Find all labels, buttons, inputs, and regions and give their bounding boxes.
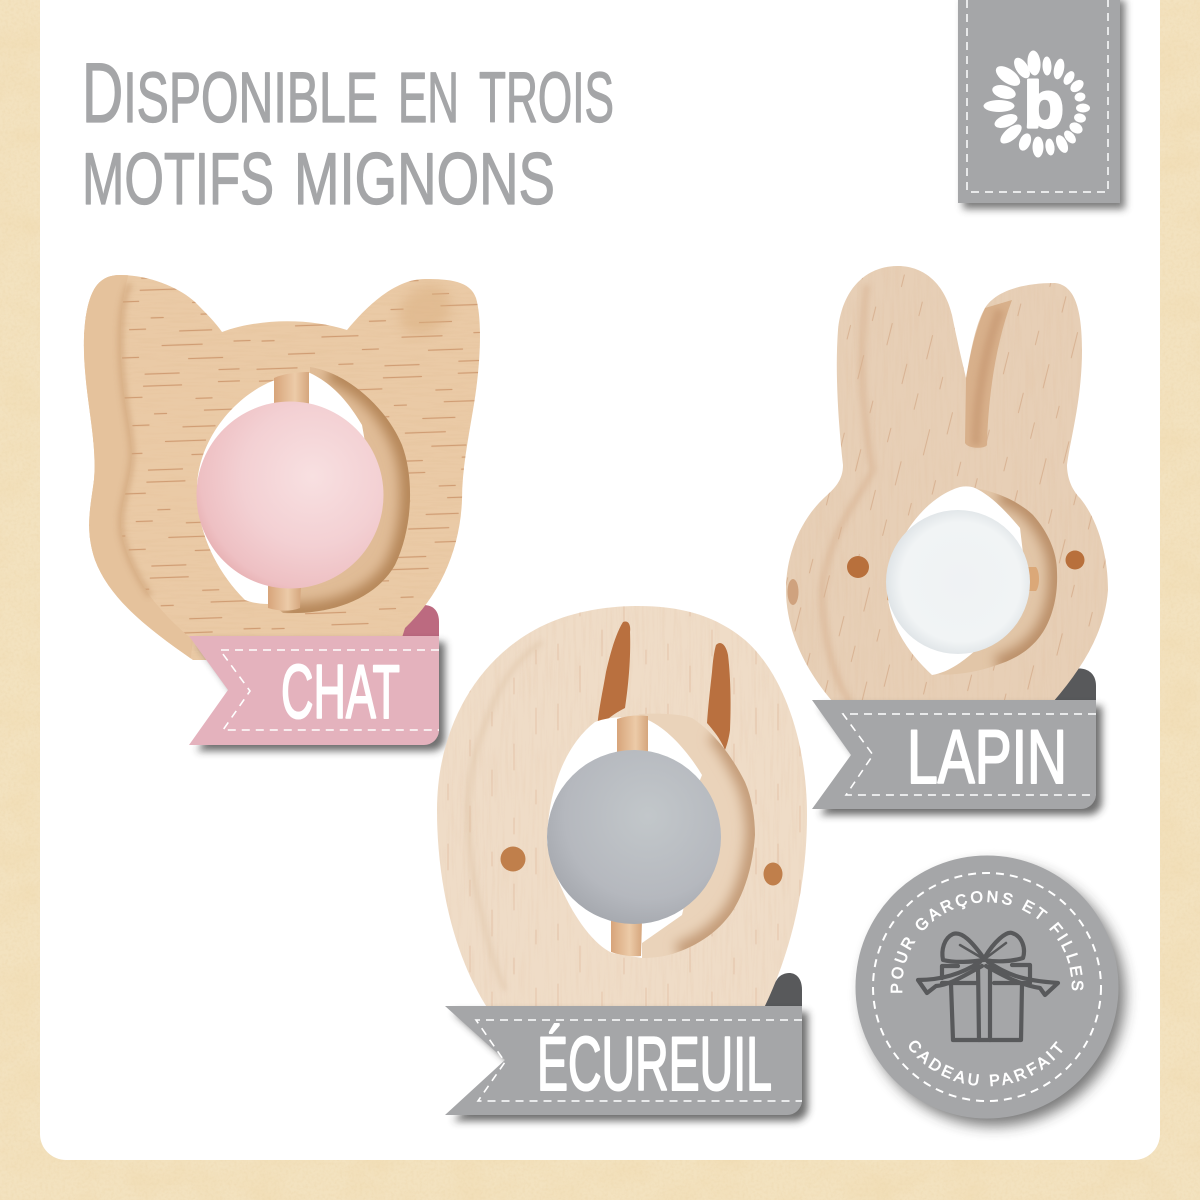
ball: white (886, 510, 1030, 654)
badge: gift (852, 854, 1136, 1136)
label ribbon: ecureuil: ÉCUREUIL (537, 1022, 772, 1107)
title: DISPONIBLE (82, 46, 378, 140)
squirrel eyes (500, 846, 782, 886)
dowel (268, 372, 309, 611)
icon: sunflower logo (984, 50, 1090, 158)
icon: gift box (918, 933, 1058, 1040)
label ribbon: lapin (812, 700, 1102, 815)
curved text (890, 890, 1084, 1086)
toy: rabbit rattle (780, 260, 1115, 710)
title: EN (398, 59, 459, 138)
title: MOTIFS (82, 139, 274, 220)
hole with inner wall (933, 487, 1057, 675)
ball: pink (196, 402, 384, 588)
title (82, 46, 614, 220)
label ribbon: chat: CHAT (281, 650, 400, 735)
ribbon fold: ecureuil (755, 973, 802, 1012)
curved text: POUR GARÇONS ET FILLES (890, 890, 1084, 993)
curved text: CADEAU PARFAIT (909, 1040, 1062, 1086)
toy: cat rattle (75, 270, 485, 665)
dowel (887, 567, 1039, 602)
brand tag with logo (958, 0, 1125, 209)
label ribbon: lapin: LAPIN (907, 715, 1067, 800)
dowel (611, 715, 648, 956)
rabbit eyes (788, 550, 1084, 605)
ball: grey (547, 750, 721, 924)
label ribbon: ecureuil (445, 1006, 808, 1121)
squirrel ears (597, 621, 731, 750)
toy: squirrel rattle (430, 600, 815, 1020)
icon: sunflower logo: b (1024, 68, 1064, 141)
hole with inner wall (638, 714, 755, 958)
title: TROIS (479, 59, 614, 138)
label ribbon: chat (189, 636, 445, 751)
ribbon fold: lapin (1040, 669, 1096, 706)
title: MIGNONS (294, 139, 555, 220)
hole with inner wall (268, 367, 410, 613)
ribbon fold: chat (380, 605, 439, 642)
